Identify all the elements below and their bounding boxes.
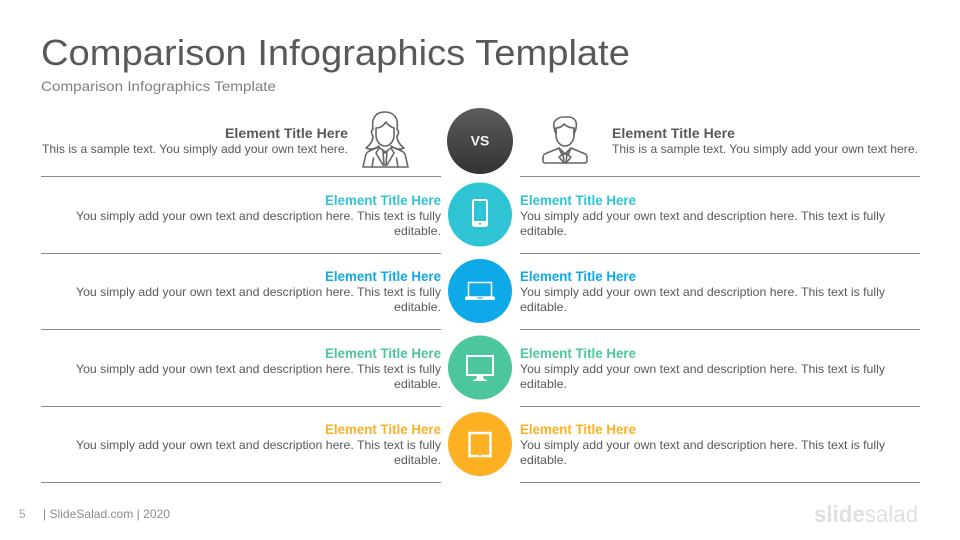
row 2 left text: You simply add your own text and description here. This text is fully (76, 285, 441, 299)
icon: monitor in green circle (448, 336, 512, 400)
row 1 right text: editable. (520, 224, 567, 238)
row 2 right text (520, 268, 885, 314)
row 3 right text: You simply add your own text and description here. This text is fully (520, 362, 885, 376)
row 1 left text: Element Title Here (325, 192, 441, 208)
row 3 left text: You simply add your own text and description here. This text is fully (76, 362, 441, 376)
VS badge: VS (471, 132, 489, 148)
subtitle: Comparison Infographics Template (41, 78, 276, 94)
header left: text block: This is a sample text. You simply add your own text here. (42, 142, 348, 156)
logo wordmark: slidesalad (814, 501, 918, 527)
row 1 right text (520, 192, 885, 238)
icon: laptop in blue circle (448, 259, 512, 323)
row 1 left text: editable. (394, 224, 441, 238)
row 4 right text: editable. (520, 453, 567, 467)
row 4 left text: Element Title Here (325, 421, 441, 437)
icon: businessman (543, 117, 587, 163)
footer credit: | SlideSalad.com | 2020 (43, 507, 170, 521)
row 4 left text: You simply add your own text and description here. This text is fully (76, 438, 441, 452)
row 1 left text: You simply add your own text and description here. This text is fully (76, 209, 441, 223)
row 3 left text: editable. (394, 377, 441, 391)
row 3 left text (76, 345, 441, 391)
row 4 right text: You simply add your own text and description here. This text is fully (520, 438, 885, 452)
row 2 right text: editable. (520, 300, 567, 314)
header left: text block: Element Title Here (225, 125, 348, 141)
header right: text block: Element Title Here (612, 125, 735, 141)
row 3 right text (520, 345, 885, 391)
row 2 left text: editable. (394, 300, 441, 314)
row 4 right text: Element Title Here (520, 421, 636, 437)
VS badge (447, 108, 513, 174)
row 1 left text (76, 192, 441, 238)
header right: text block: This is a sample text. You simply add your own text here. (612, 142, 918, 156)
row 1 right text: You simply add your own text and description here. This text is fully (520, 209, 885, 223)
row 4 left text: editable. (394, 453, 441, 467)
row 2 right text: Element Title Here (520, 268, 636, 284)
row 3 right text: Element Title Here (520, 345, 636, 361)
row 4 right text (520, 421, 885, 467)
row 4 left text (76, 421, 441, 467)
title: Comparison Infographics Template (41, 32, 630, 73)
header right: text block (612, 125, 918, 156)
row 3 left text: Element Title Here (325, 345, 441, 361)
row 2 left text (76, 268, 441, 314)
header left: text block (42, 125, 348, 156)
row 1 right text: Element Title Here (520, 192, 636, 208)
row 3 right text: editable. (520, 377, 567, 391)
icon: phone in teal circle (448, 182, 512, 246)
icon: tablet in amber circle (448, 412, 512, 476)
footer page number: 5 (19, 507, 26, 521)
row 2 right text: You simply add your own text and description here. This text is fully (520, 285, 885, 299)
icon: businesswoman (363, 112, 408, 167)
row 2 left text: Element Title Here (325, 268, 441, 284)
